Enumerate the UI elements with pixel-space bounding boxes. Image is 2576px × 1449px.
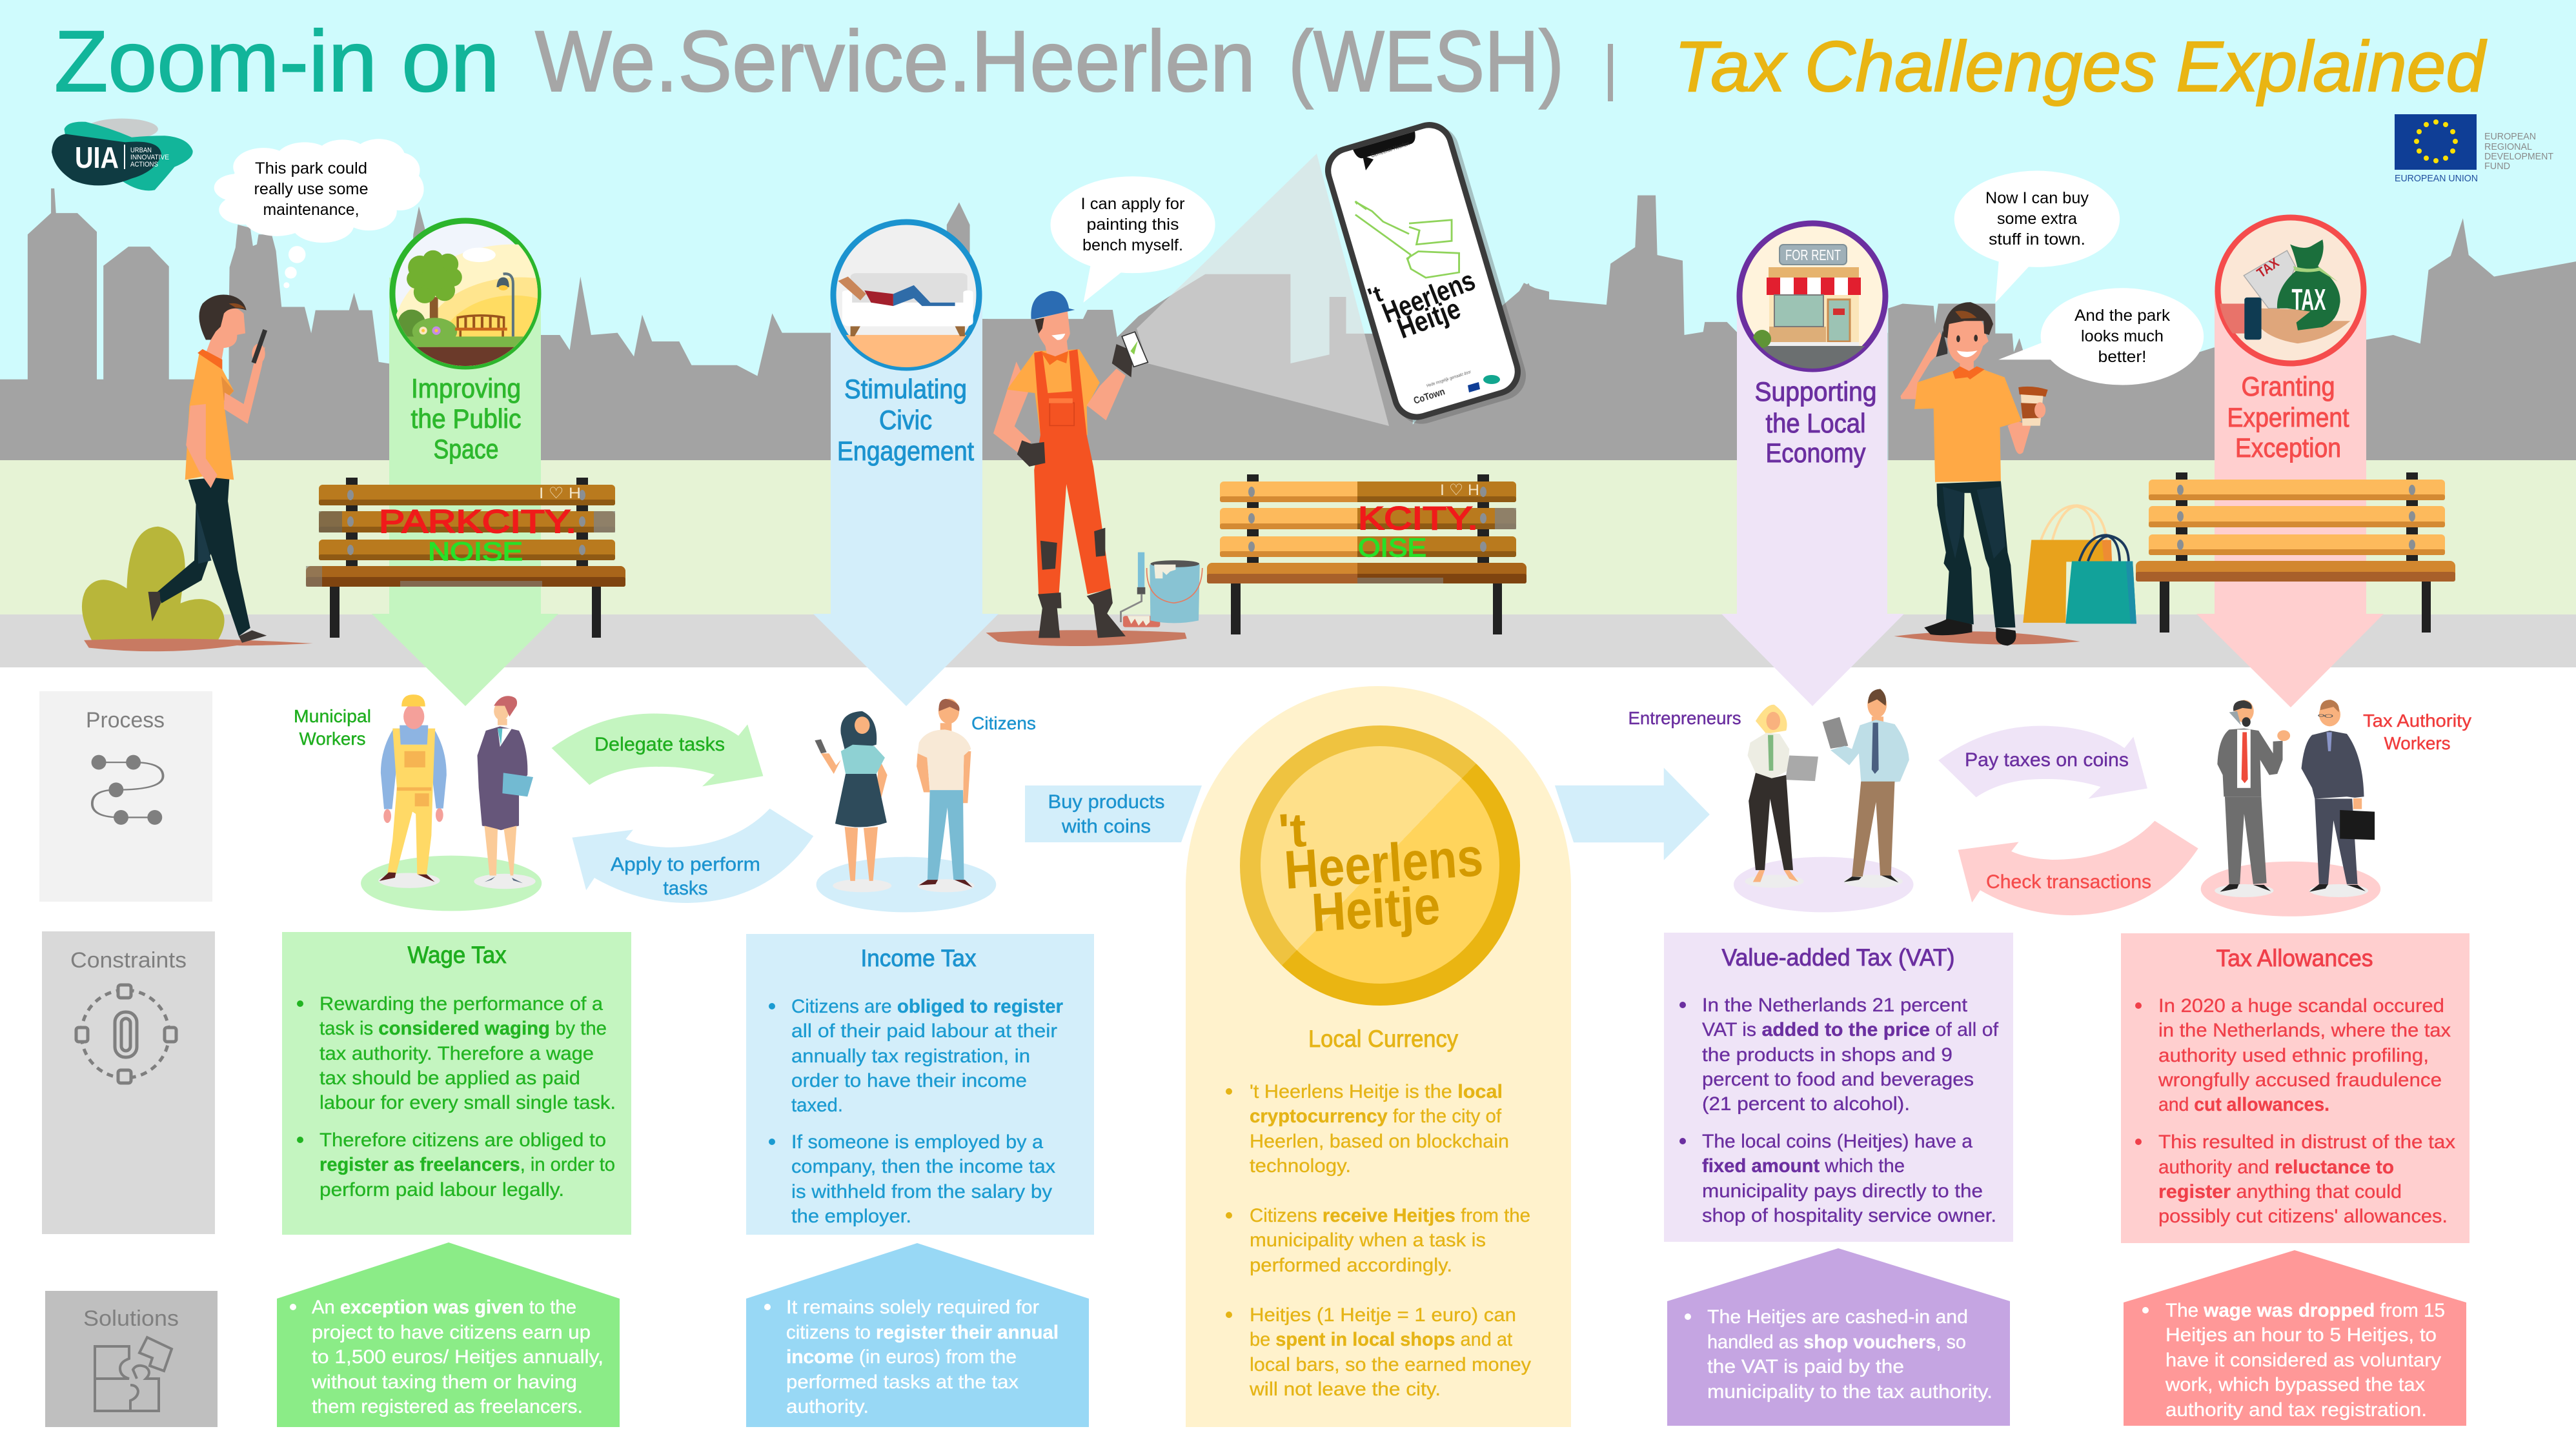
column headings: the Local	[1766, 408, 1865, 438]
solution: wage tax: An exception was given to the	[312, 1297, 576, 1318]
badge: granting experiment exception: TAX	[2291, 283, 2326, 316]
column headings: Experiment	[2227, 402, 2349, 432]
big phone showing the Heerlens Heitje app	[1319, 115, 1532, 431]
speech bubble: park looks better: And the park	[2074, 307, 2171, 325]
background: skyline far right	[2357, 218, 2576, 461]
panel: local currency: technology.	[1250, 1155, 1351, 1177]
badge: supporting the local economy: FOR RENT	[1785, 247, 1841, 263]
panel: wage tax: perform paid labour legally.	[319, 1179, 564, 1201]
solution: vat: the VAT is paid by the	[1707, 1356, 1904, 1377]
panel: value-added tax: fixed amount which the	[1702, 1155, 1905, 1177]
panel: wage tax: tax should be applied as paid	[319, 1068, 580, 1089]
logo: EU flag	[2395, 114, 2553, 184]
process: municipal workers: Municipal	[294, 706, 371, 726]
icon: process path	[92, 755, 163, 825]
box: buy products with coins: with coins	[1061, 816, 1151, 837]
logo: UIA: ACTIONS	[130, 161, 158, 168]
process: citizens: Citizens	[971, 713, 1036, 733]
title: Tax Challenges Explained	[1674, 27, 2488, 106]
logo: EU flag: REGIONAL	[2484, 141, 2532, 152]
panel: tax allowances: and cut allowances.	[2158, 1094, 2329, 1115]
panel: tax allowances	[2121, 933, 2470, 1243]
panel: income tax: all of their paid labour at their	[791, 1020, 1057, 1042]
solution: tax allowances: work, which bypassed the tax	[2165, 1374, 2425, 1395]
badge: granting experiment exception	[2218, 218, 2364, 363]
speech bubble: park looks better: looks much	[2081, 327, 2164, 345]
column headings: the Public	[411, 403, 522, 434]
panel: value-added tax: the products in shops and 9	[1702, 1044, 1952, 1066]
big phone showing the Heerlens Heitje app: CoTown	[1412, 386, 1446, 407]
panel: wage tax: Wage Tax	[408, 942, 507, 968]
process: tax authority workers	[2201, 700, 2471, 917]
panel: tax allowances: In 2020 a huge scandal occured	[2158, 995, 2444, 1017]
arrow: check transactions	[1958, 821, 2198, 915]
process: municipal workers	[294, 694, 542, 911]
panel: value-added tax: VAT is added to the price of all of	[1702, 1019, 1999, 1040]
thought bubble: park maintenance: This park could	[255, 159, 367, 177]
background: skyline behind worker	[982, 274, 1549, 461]
panel: local currency: cryptocurrency for the city of	[1250, 1106, 1502, 1127]
bench: rusty with graffiti: NOISE	[428, 538, 523, 566]
panel: income tax: company, then the income tax	[791, 1156, 1055, 1177]
solution: tax allowances	[2124, 1250, 2466, 1426]
column headings: Improving	[411, 373, 521, 403]
background: pavement	[0, 614, 2576, 667]
panel: wage tax: task is considered waging by the	[319, 1018, 607, 1039]
panel: value-added tax: shop of hospitality service owner.	[1702, 1205, 1996, 1226]
coin: Heerlens	[1283, 826, 1485, 900]
bench: half repaired: I ♡ H	[1440, 481, 1479, 499]
solution: wage tax: them registered as freelancers.	[312, 1396, 583, 1417]
panel: tax allowances: possibly cut citizens' allowances.	[2158, 1206, 2448, 1227]
arrow: delegate tasks	[552, 714, 763, 786]
arrow: delegate tasks: Delegate tasks	[594, 734, 725, 755]
title: We.Service.Heerlen	[535, 14, 1255, 110]
panel: wage tax: register as freelancers, in order to	[319, 1154, 615, 1175]
background: skyline centre left	[461, 202, 988, 461]
box: buy products with coins	[1025, 785, 1202, 842]
badge: improving the public space	[390, 218, 541, 369]
bench: rusty with graffiti: PARKCITY.	[379, 503, 576, 540]
speech bubble: buy stuff in town: stuff in town.	[1989, 230, 2085, 248]
process: entrepreneurs	[1628, 689, 1913, 912]
panel: income tax: Citizens are obliged to register	[791, 996, 1063, 1017]
bench: half repaired: KCITY.	[1358, 500, 1478, 536]
panel: value-added tax: percent to food and beverages	[1702, 1069, 1974, 1090]
solution: wage tax: without taxing them or having	[311, 1372, 577, 1393]
panel: local currency: will not leave the city.	[1249, 1379, 1441, 1400]
badge: supporting the local economy	[1736, 223, 1891, 378]
big phone showing the Heerlens Heitje app: 't	[1364, 280, 1386, 310]
man walking with phone	[84, 295, 313, 651]
panel: local currency	[1186, 686, 1571, 1427]
solution: vat: handled as shop vouchers, so	[1707, 1332, 1966, 1353]
panel: income tax: If someone is employed by a	[791, 1131, 1043, 1153]
speech bubble: buy stuff in town: some extra	[1997, 210, 2077, 228]
bench: half repaired: OISE	[1358, 534, 1426, 562]
green arrow column	[372, 278, 558, 706]
column headings: Supporting	[1754, 376, 1877, 407]
panel: value-added tax: (21 percent to alcohol).	[1702, 1093, 1910, 1115]
pink arrow column	[2196, 290, 2384, 707]
background: skyline far left	[0, 188, 427, 461]
box: buy products with coins: Buy products	[1048, 791, 1164, 813]
speech bubble: apply for painting: bench myself.	[1082, 236, 1183, 254]
thought bubble: park maintenance: really use some	[254, 180, 368, 198]
solution: wage tax: to 1,500 euros/ Heitjes annually,	[312, 1346, 603, 1368]
bench: rusty with graffiti	[306, 478, 625, 638]
panel: tax allowances: authority and reluctance to	[2158, 1157, 2394, 1178]
logo: EU flag: EUROPEAN	[2484, 131, 2536, 142]
panel: local currency: municipality when a task is	[1250, 1230, 1486, 1251]
icon: puzzle	[95, 1337, 172, 1411]
panel: value-added tax: In the Netherlands 21 percent	[1702, 995, 1968, 1016]
solution: income tax: It remains solely required for	[786, 1297, 1039, 1318]
process: entrepreneurs: Entrepreneurs	[1628, 708, 1741, 728]
column headings: Economy	[1766, 438, 1865, 468]
panel: tax allowances: authority used ethnic profiling,	[2158, 1045, 2429, 1066]
panel: income tax: is withheld from the salary by	[791, 1181, 1052, 1202]
phone light beam	[1137, 154, 1389, 426]
purple arrow column	[1721, 290, 1904, 706]
logo: UIA	[52, 119, 193, 190]
man on phone with coffee and shopping bags	[1894, 302, 2136, 645]
column headings: Engagement	[837, 436, 974, 466]
solution: vat: municipality to the tax authority.	[1707, 1381, 1993, 1403]
bench: half repaired	[1207, 474, 1526, 634]
panel: process label: Process	[86, 708, 165, 733]
speech bubble: apply for painting: painting this	[1087, 216, 1179, 234]
background: grass band	[0, 460, 2576, 614]
panel: tax allowances: wrongfully accused fraudulence	[2158, 1069, 2442, 1091]
title: (WESH)	[1288, 14, 1564, 110]
big phone showing the Heerlens Heitje app: Gemeente Heerlen	[1370, 140, 1410, 159]
panel: local currency: performed accordingly.	[1250, 1255, 1452, 1276]
column headings: Exception	[2235, 432, 2341, 463]
panel: local currency: 't Heerlens Heitje is the local	[1250, 1081, 1503, 1102]
arrow: pay taxes on coins	[1938, 726, 2147, 798]
panel: local currency: local bars, so the earned money	[1250, 1354, 1531, 1375]
big phone showing the Heerlens Heitje app: Heerlens	[1378, 265, 1479, 329]
arrow: coins flow to entrepreneurs	[1555, 767, 1710, 860]
panel: value-added tax: municipality pays directly to the	[1702, 1180, 1983, 1202]
solution: wage tax: project to have citizens earn up	[312, 1322, 591, 1343]
background: sky	[0, 0, 2576, 460]
panel: value-added tax: The local coins (Heitjes) have a	[1702, 1131, 1973, 1152]
speech bubble: apply for painting: I can apply for	[1080, 195, 1185, 213]
thought bubble: park maintenance	[214, 139, 424, 288]
big phone showing the Heerlens Heitje app: Hede mogelijk gemaakt door	[1426, 370, 1472, 389]
thought bubble: park maintenance: maintenance,	[263, 201, 359, 219]
big phone showing the Heerlens Heitje app: Heitje	[1393, 293, 1465, 345]
panel: wage tax	[282, 932, 631, 1235]
column headings: Space	[434, 434, 498, 464]
arrow: apply to perform tasks: tasks	[664, 878, 707, 899]
logo: EU flag: EUROPEAN UNION	[2395, 173, 2478, 184]
panel: solutions label	[45, 1291, 218, 1427]
background: skyline centre right	[1496, 196, 1887, 461]
process: citizens	[815, 698, 1036, 912]
solution: tax allowances: Heitjes an hour to 5 Heitjes, to	[2165, 1324, 2437, 1346]
panel: wage tax: labour for every small single task.	[319, 1092, 616, 1113]
panel: wage tax: Rewarding the performance of a	[319, 993, 603, 1015]
arrow: check transactions: Check transactions	[1986, 871, 2151, 893]
panel: solutions label: Solutions	[83, 1306, 179, 1331]
panel: tax allowances: in the Netherlands, where the tax	[2158, 1020, 2451, 1041]
logo: UIA: URBAN	[130, 147, 152, 154]
solution: tax allowances: authority and tax registration.	[2165, 1399, 2427, 1421]
solution: vat	[1667, 1248, 2010, 1426]
panel: local currency: Citizens receive Heitjes from the	[1250, 1205, 1530, 1226]
column headings: Civic	[879, 405, 932, 435]
panel: income tax: the employer.	[791, 1206, 911, 1227]
panel: tax allowances: This resulted in distrust of the tax	[2158, 1131, 2455, 1153]
panel: local currency: Local Currency	[1308, 1026, 1458, 1052]
arrow: pay taxes on coins: Pay taxes on coins	[1965, 749, 2129, 771]
bush	[82, 527, 225, 641]
coin: Heitje	[1310, 875, 1442, 943]
solution: tax allowances: have it considered as voluntary	[2165, 1350, 2441, 1371]
speech bubble: park looks better	[1998, 288, 2204, 385]
logo: EU flag: FUND	[2484, 161, 2510, 172]
bench: rusty with graffiti: I ♡ H	[539, 485, 581, 502]
speech bubble: buy stuff in town: Now I can buy	[1985, 189, 2089, 207]
panel: wage tax: tax authority. Therefore a wage	[319, 1043, 594, 1064]
process: tax authority workers: Tax Authority	[2363, 711, 2471, 731]
panel: process label	[39, 691, 212, 902]
icon: chain link in dashed ring	[76, 985, 176, 1083]
process: tax authority workers: Workers	[2384, 733, 2450, 753]
solution: income tax: citizens to register their annual	[786, 1322, 1059, 1343]
panel: income tax: taxed.	[791, 1095, 843, 1116]
solution: tax allowances: The wage was dropped from 15	[2165, 1300, 2445, 1321]
panel: local currency: Heitjes (1 Heitje = 1 euro) can	[1250, 1304, 1516, 1326]
coin	[1240, 725, 1520, 1006]
panel: constraints label	[42, 931, 215, 1234]
title: Zoom-in on	[54, 14, 500, 110]
solution: income tax: income (in euros) from the	[786, 1346, 1017, 1368]
panel: local currency: Heerlen, based on blockchain	[1250, 1131, 1509, 1152]
panel: income tax	[746, 934, 1094, 1235]
panel: local currency: be spent in local shops and at	[1250, 1329, 1513, 1350]
panel: income tax: order to have their income	[791, 1070, 1027, 1091]
logo: UIA: UIA	[75, 141, 119, 174]
arrow: apply to perform tasks	[572, 809, 813, 903]
title	[54, 14, 2488, 110]
speech bubble: buy stuff in town	[1954, 171, 2120, 303]
panel: value-added tax	[1664, 933, 2013, 1242]
panel: value-added tax: Value-added Tax (VAT)	[1722, 944, 1954, 971]
solution: wage tax	[277, 1242, 620, 1427]
worker with phone and paint bucket	[986, 291, 1202, 646]
logo: EU flag: DEVELOPMENT	[2484, 151, 2553, 162]
bench: fully repaired	[2136, 472, 2455, 633]
panel: constraints label: Constraints	[70, 948, 187, 973]
process: municipal workers: Workers	[299, 729, 365, 749]
solution: income tax: performed tasks at the tax	[786, 1372, 1019, 1393]
speech bubble: apply for painting	[1051, 176, 1215, 303]
column headings: Granting	[2241, 371, 2335, 401]
logo: UIA: INNOVATIVE	[130, 154, 169, 161]
coin: 't	[1277, 803, 1308, 858]
panel: tax allowances: Tax Allowances	[2216, 945, 2373, 971]
panel: wage tax: Therefore citizens are obliged to	[319, 1130, 606, 1151]
background: skyline behind shopper	[1888, 304, 2215, 460]
arrow: apply to perform tasks: Apply to perform	[611, 854, 760, 875]
solution: income tax: authority.	[786, 1396, 869, 1417]
column headings	[411, 371, 2349, 468]
solution: vat: The Heitjes are cashed-in and	[1707, 1306, 1968, 1328]
column headings: Stimulating	[844, 374, 967, 404]
badge: stimulating civic engagement	[824, 222, 988, 374]
solution: income tax	[746, 1243, 1089, 1427]
panel: income tax: Income Tax	[861, 945, 977, 971]
panel: income tax: annually tax registration, in	[791, 1046, 1030, 1067]
blue arrow column	[813, 290, 999, 706]
panel: tax allowances: register anything that could	[2158, 1181, 2402, 1202]
speech bubble: park looks better: better!	[2098, 348, 2147, 366]
badge: granting experiment exception: TAX	[2255, 256, 2282, 281]
